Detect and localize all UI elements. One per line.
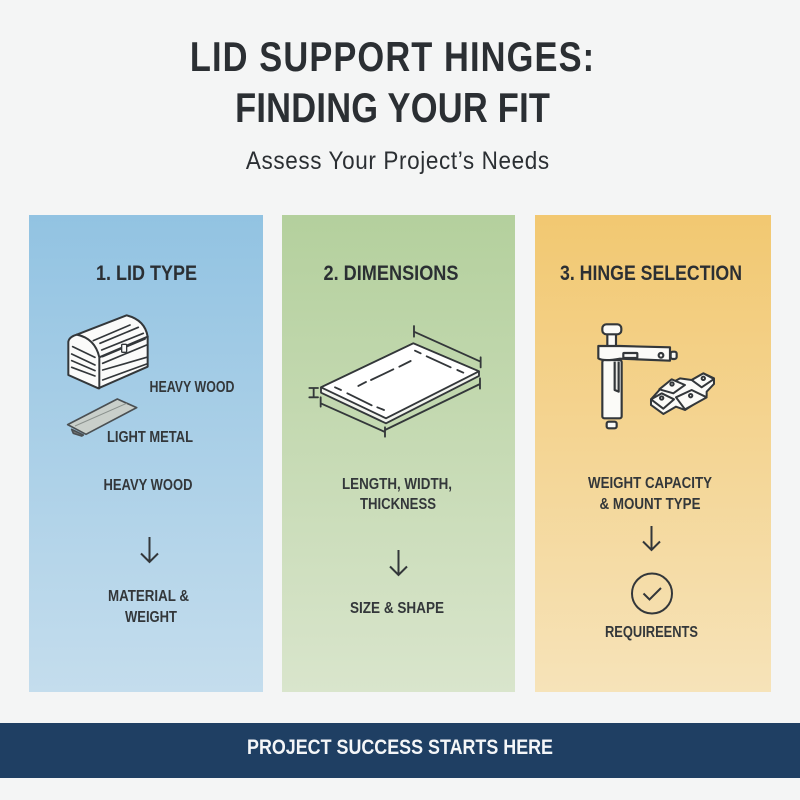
label: length width thickness: THICKNESS: [360, 496, 436, 513]
label: size and shape: SIZE & SHAPE: [350, 600, 444, 617]
footer banner: PROJECT SUCCESS STARTS HERE: [247, 736, 553, 759]
heading: dimensions: 2. DIMENSIONS: [324, 262, 458, 285]
label: requirements: REQUIREENTS: [605, 624, 698, 641]
icon: chest: [68, 315, 148, 388]
label: weight capacity and mount type: & MOUNT TYPE: [600, 496, 700, 513]
label: weight capacity and mount type: [588, 475, 713, 513]
icon: metal plate: [68, 399, 137, 436]
label: material and weight: [108, 588, 189, 626]
panel: lid type: [29, 215, 263, 692]
arrow: [643, 526, 660, 550]
title: LID SUPPORT HINGES:: [190, 34, 594, 81]
heading: lid type: 1. LID TYPE: [96, 262, 197, 285]
heading: hinge selection: 3. HINGE SELECTION: [560, 262, 742, 285]
label: weight capacity and mount type: WEIGHT CAPACITY: [588, 475, 713, 492]
label: material and weight: WEIGHT: [125, 609, 177, 626]
arrow: [141, 537, 158, 562]
label: light metal: LIGHT METAL: [107, 429, 193, 446]
label: heavy wood upper: HEAVY WOOD: [150, 379, 234, 396]
panel: dimensions: [282, 215, 515, 692]
title: [190, 34, 594, 132]
title: FINDING YOUR FIT: [235, 85, 550, 132]
icon: board: [309, 326, 481, 437]
footer banner: [0, 723, 800, 778]
subtitle: Assess Your Project’s Needs: [246, 147, 549, 175]
arrow: [390, 550, 407, 575]
panel: hinge selection: [535, 215, 771, 692]
label: material and weight: MATERIAL &: [108, 588, 189, 605]
label: length width thickness: LENGTH, WIDTH,: [342, 476, 452, 493]
label: length width thickness: [342, 476, 452, 513]
icon: lid stay hinge: [598, 324, 677, 428]
icon: flat hinge: [651, 373, 714, 414]
icon: check circle: [632, 574, 672, 614]
label: heavy wood: HEAVY WOOD: [104, 477, 192, 494]
